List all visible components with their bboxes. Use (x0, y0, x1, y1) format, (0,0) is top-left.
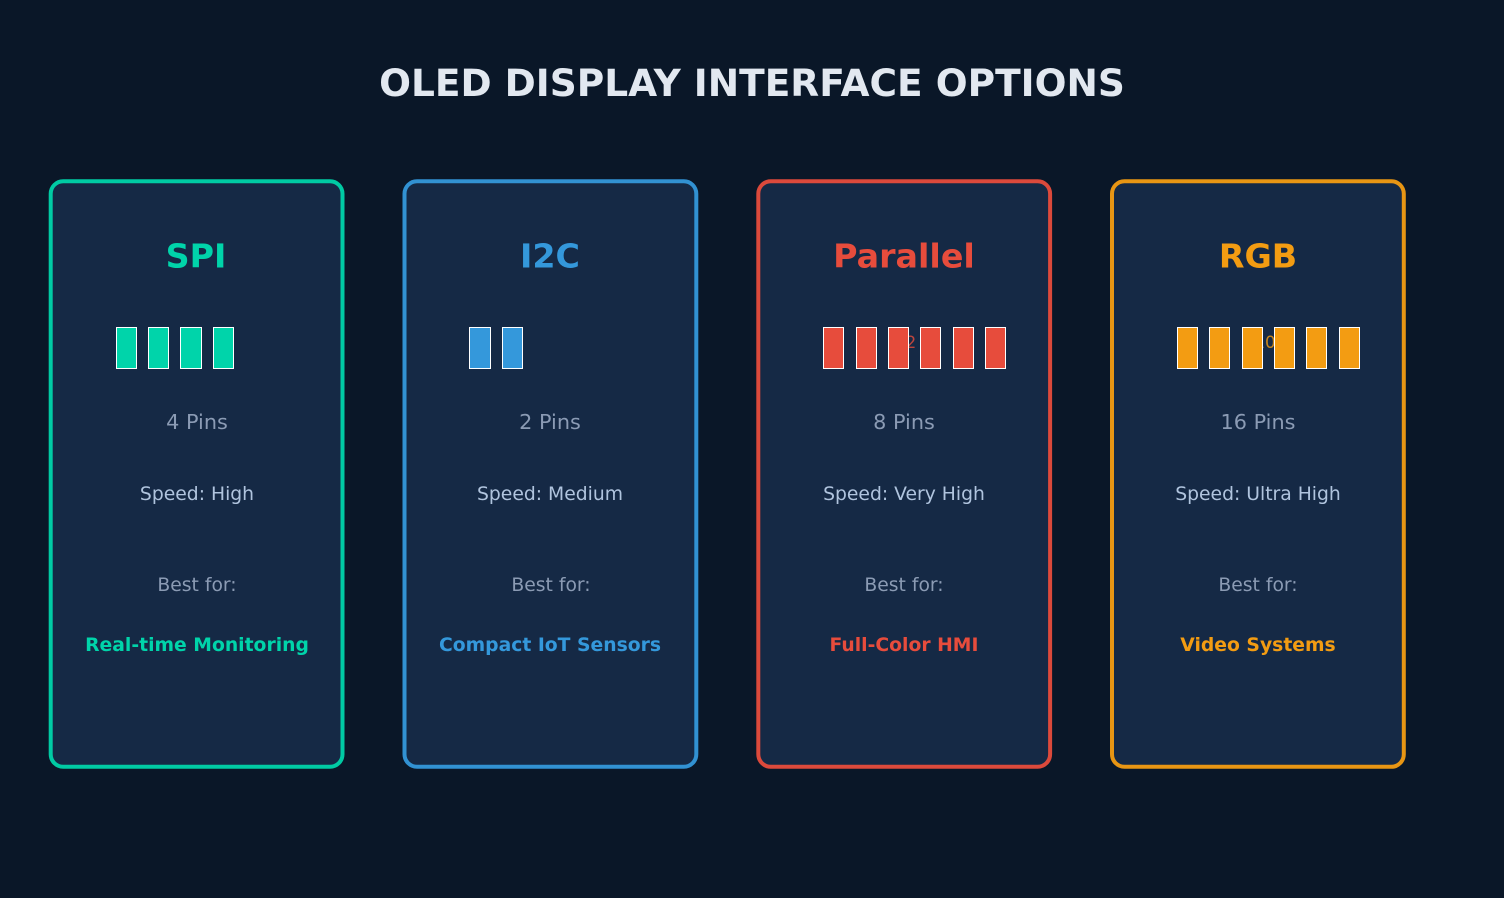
panel: I2C (404, 181, 696, 767)
pin count: 4 Pins (166, 410, 228, 434)
extra pins label: +10 (1240, 332, 1276, 352)
pin count: 8 Pins (873, 410, 935, 434)
use case: Full-Color HMI (830, 635, 978, 656)
heading: I2C: I2C (520, 236, 580, 276)
best for label: Best for: (157, 575, 237, 596)
best for label: Best for: (511, 575, 591, 596)
heading: SPI: SPI (166, 236, 226, 276)
best for label: Best for: (1218, 575, 1298, 596)
speed: Speed: Very High (823, 484, 985, 505)
panel: Parallel (758, 181, 1050, 767)
heading: Parallel: Parallel (833, 236, 975, 276)
icon: pins (824, 328, 1006, 368)
title: OLED DISPLAY INTERFACE OPTIONS (379, 61, 1125, 105)
pin count: 2 Pins (519, 410, 581, 434)
use case: Video Systems (1180, 635, 1336, 656)
speed: Speed: High (140, 484, 254, 505)
best for label: Best for: (864, 575, 944, 596)
icon: 2 pins (470, 328, 522, 368)
icon: 4 pins (116, 328, 234, 368)
panel: RGB (1112, 181, 1404, 767)
extra pins label: +2 (892, 332, 916, 352)
pin count: 16 Pins (1221, 410, 1295, 434)
speed: Speed: Ultra High (1175, 484, 1341, 505)
use case: Real-time Monitoring (85, 635, 309, 656)
panel: SPI (51, 181, 342, 767)
icon: pins (1178, 328, 1360, 368)
speed: Speed: Medium (477, 484, 623, 505)
heading: RGB: RGB (1219, 236, 1297, 276)
use case: Compact IoT Sensors (439, 635, 661, 656)
